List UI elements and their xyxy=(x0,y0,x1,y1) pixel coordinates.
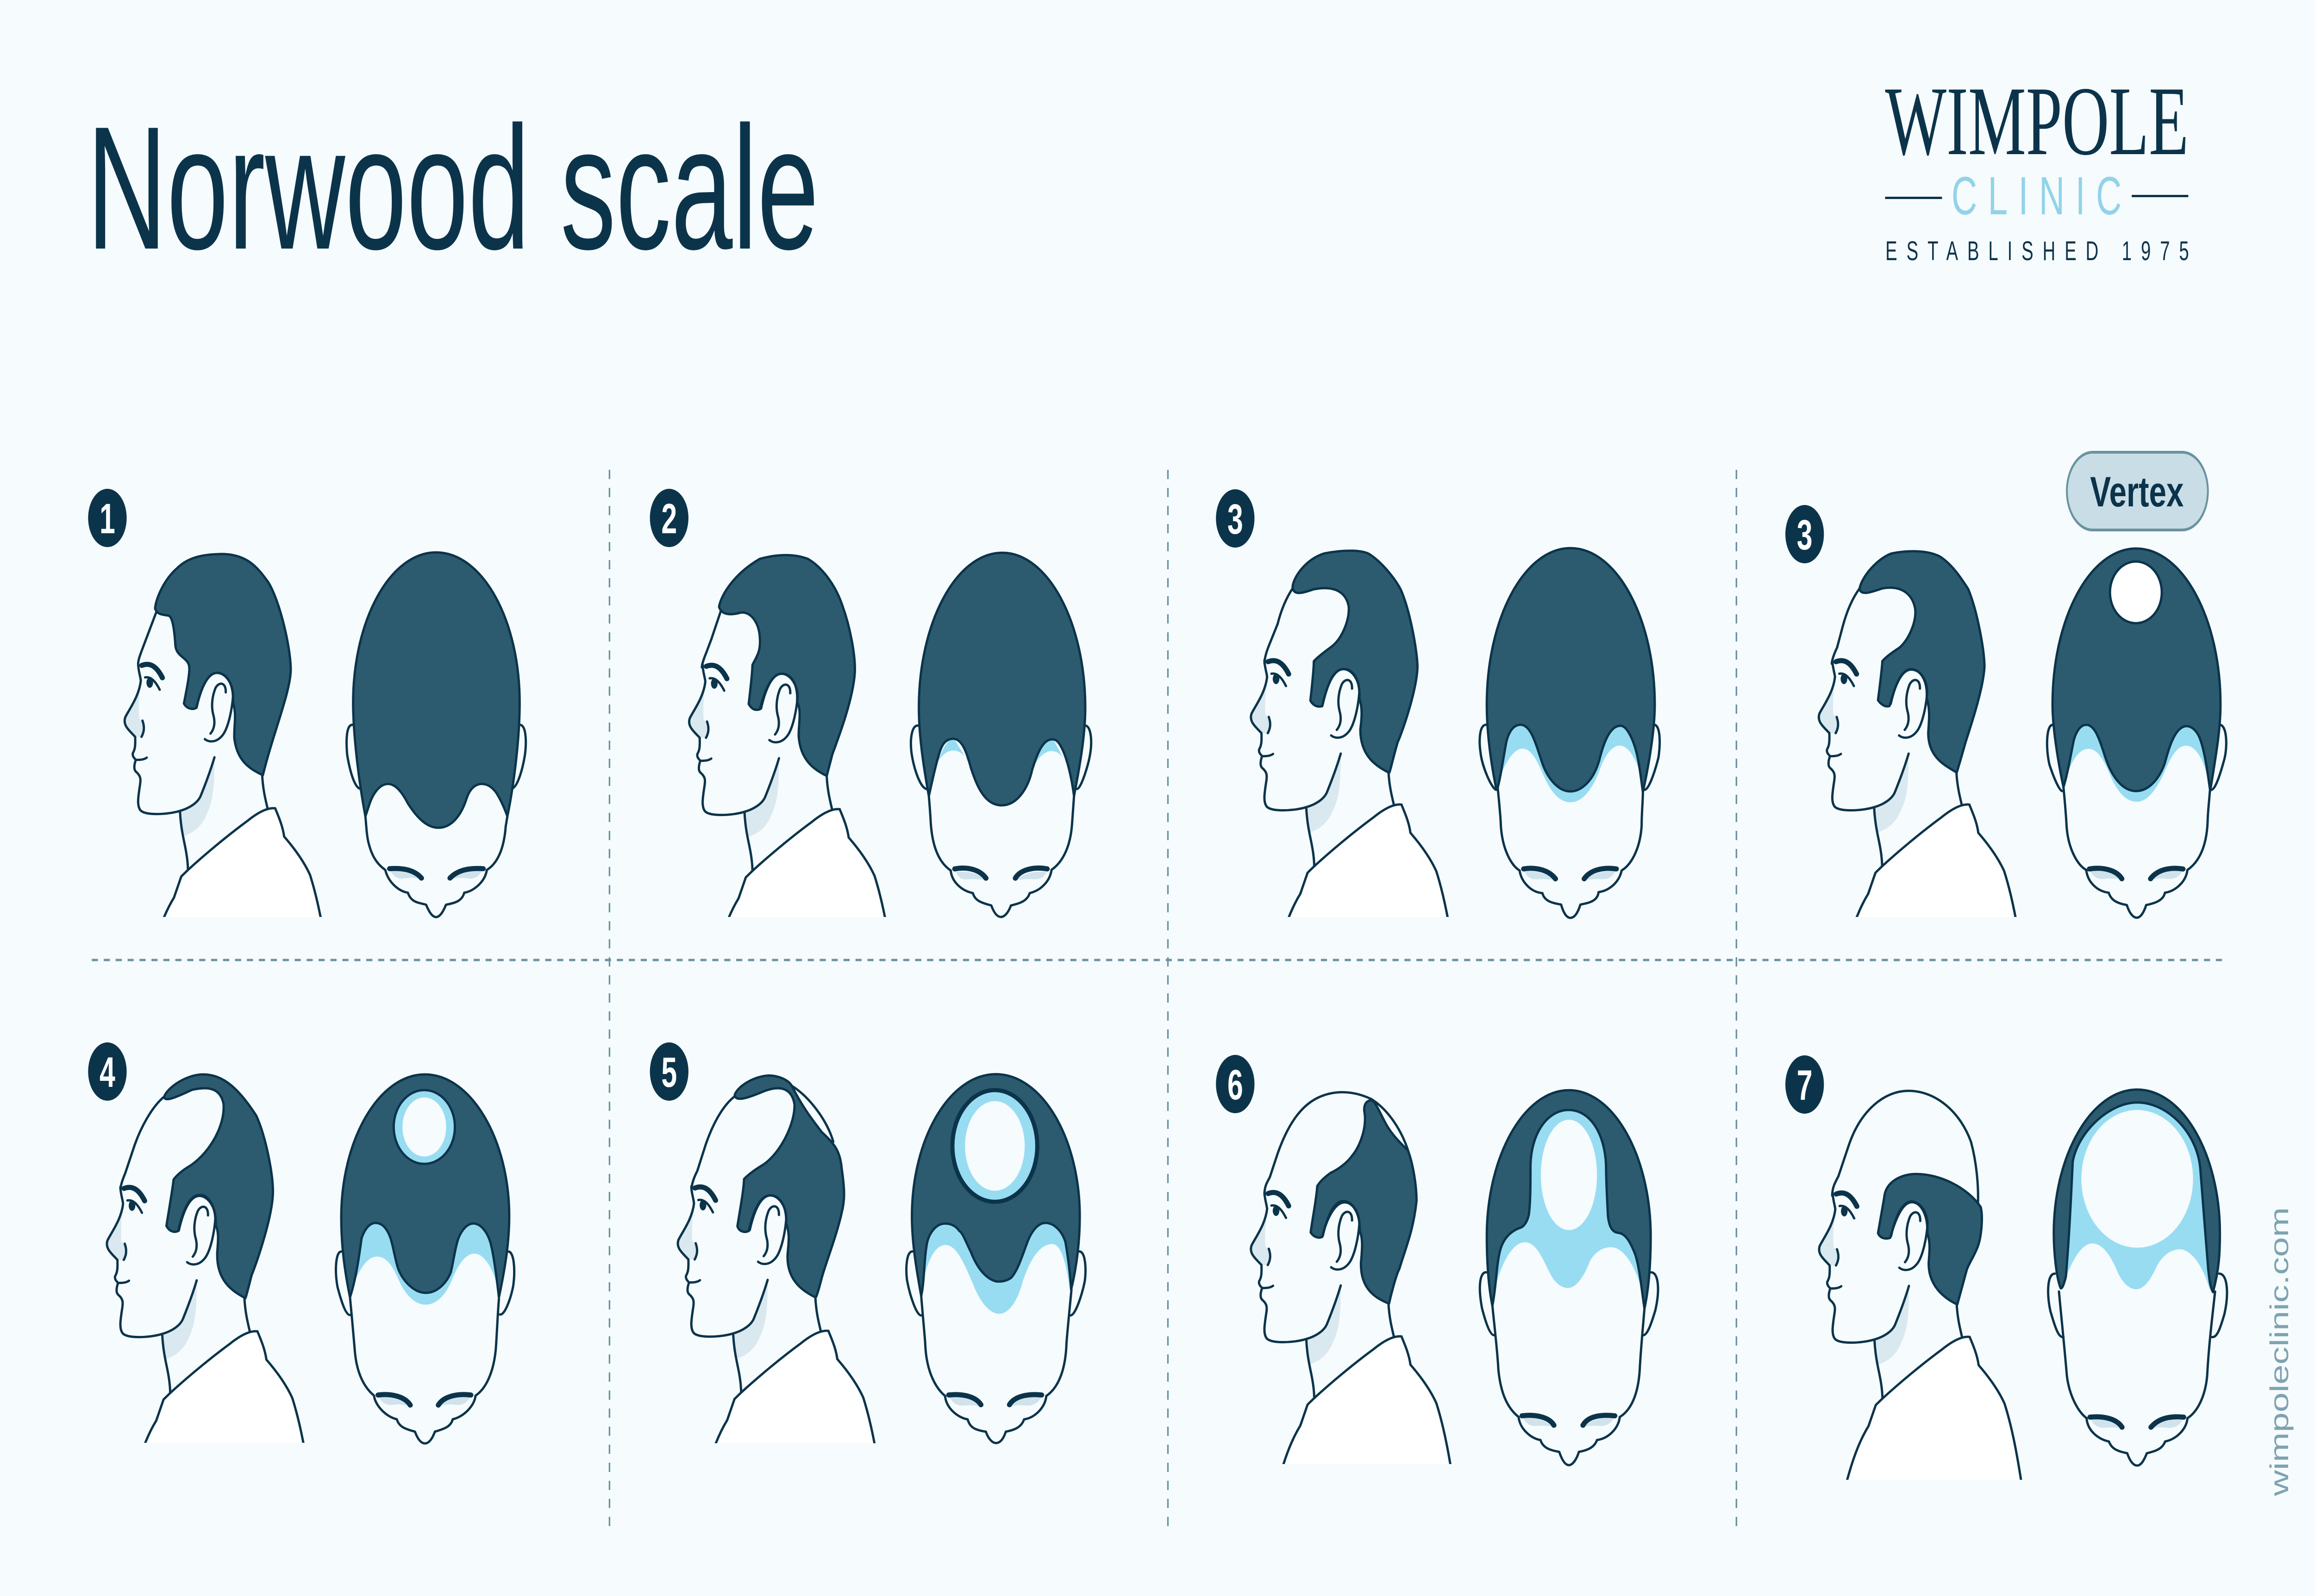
side profile stage 3 vertex xyxy=(1818,550,2017,917)
number badge 2 xyxy=(650,489,688,547)
title: Norwood scale xyxy=(87,90,819,286)
panel: stage 5 xyxy=(650,1042,1085,1478)
side profile stage 7 xyxy=(1819,1091,2022,1484)
panel: stage 3 vertex xyxy=(1785,452,2226,952)
side profile stage 6 xyxy=(1251,1092,1453,1484)
logo: Wimpole Clinic: ESTABLISHED 1975 xyxy=(1885,237,2189,266)
number badge 1: 1 xyxy=(100,494,115,542)
number badge 4: 4 xyxy=(100,1048,115,1096)
side profile stage 4 xyxy=(106,1074,309,1479)
panel: stage 7 xyxy=(1785,1055,2227,1484)
vertex label xyxy=(2067,452,2208,530)
top view stage 3 xyxy=(1480,548,1660,918)
vertex label: Vertex xyxy=(2090,468,2184,516)
number badge 7: 7 xyxy=(1797,1061,1813,1109)
top view stage 1 xyxy=(347,552,526,917)
number badge 5 xyxy=(650,1042,688,1101)
number badge 6: 6 xyxy=(1227,1060,1243,1109)
website address: wimpoleclinic.com xyxy=(2265,1207,2294,1496)
number badge 1 xyxy=(88,489,127,547)
panel: stage 4 xyxy=(88,1042,514,1479)
number badge 3 vertex: 3 xyxy=(1797,511,1813,559)
logo: Wimpole Clinic: WIMPOLE xyxy=(1885,67,2189,176)
logo: Wimpole Clinic: CLINIC xyxy=(1952,166,2121,226)
number badge 7 xyxy=(1785,1055,1824,1114)
number badge 2: 2 xyxy=(661,494,677,542)
side profile stage 1 xyxy=(123,553,322,917)
number badge 3 vertex xyxy=(1785,505,1824,563)
grid dividers xyxy=(92,470,2227,1530)
top view stage 4 xyxy=(336,1074,514,1443)
top view stage 3 vertex xyxy=(2047,549,2226,918)
top view stage 2 xyxy=(911,553,1091,917)
number badge 6 xyxy=(1216,1055,1254,1113)
panel: stage 2 xyxy=(650,489,1091,957)
side profile stage 3 xyxy=(1250,549,1449,917)
top view stage 5 xyxy=(907,1074,1085,1443)
number badge 3: 3 xyxy=(1227,495,1243,543)
panel: stage 6 xyxy=(1216,1055,1658,1484)
logo: Wimpole Clinic xyxy=(1885,67,2189,266)
panel: stage 1 xyxy=(88,489,526,956)
panel: stage 3 xyxy=(1216,489,1660,952)
number badge 3 xyxy=(1216,489,1254,548)
side profile stage 5 xyxy=(677,1075,881,1478)
side profile stage 2 xyxy=(688,554,886,917)
top view stage 7 xyxy=(2048,1090,2227,1465)
number badge 5: 5 xyxy=(661,1048,677,1096)
top view stage 6 xyxy=(1480,1090,1658,1465)
number badge 4 xyxy=(88,1042,127,1101)
